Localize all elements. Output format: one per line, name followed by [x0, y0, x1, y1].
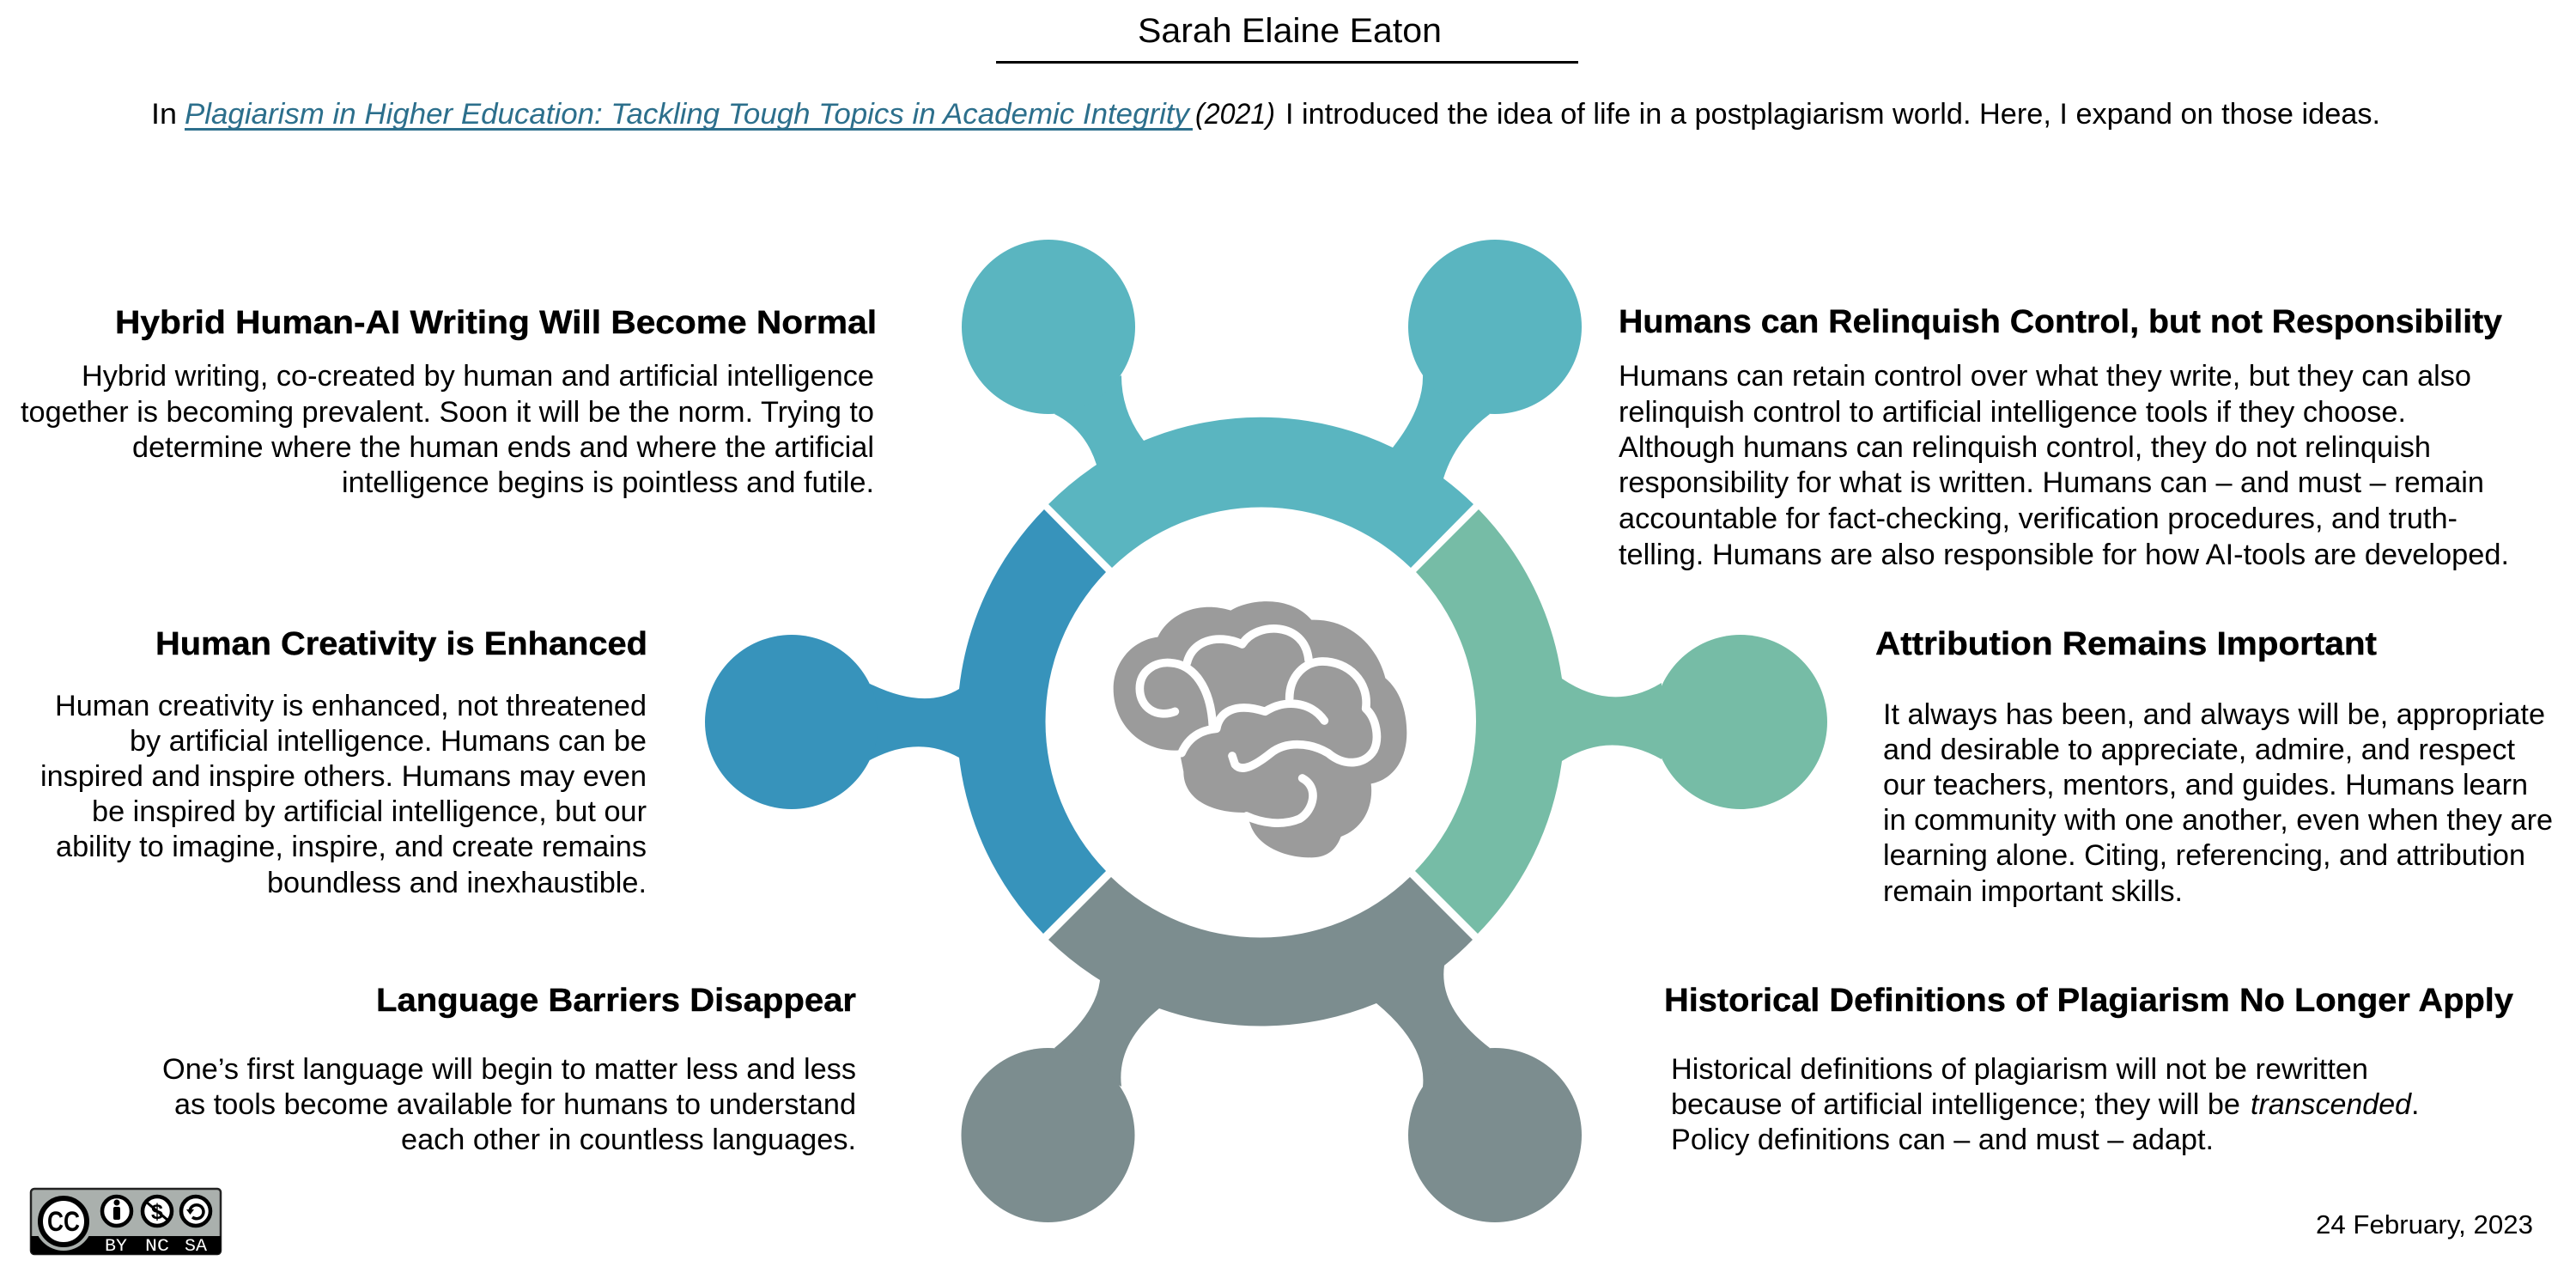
- heading: Attribution Remains Important: [1875, 626, 2377, 662]
- ring segment: right, green, with one arm: [1415, 509, 1827, 934]
- ring segment: left, blue, with one arm: [705, 509, 1106, 934]
- panel: hybrid writing: [21, 305, 877, 499]
- body text: determine where the human ends and where the artificial: [132, 431, 874, 464]
- icon: Creative Commons BY-NC-SA badge: [31, 1189, 221, 1257]
- body text: each other in countless languages.: [401, 1124, 856, 1156]
- body text: inspired and inspire others. Humans may even: [40, 760, 647, 793]
- body text: be inspired by artificial intelligence, but our: [92, 795, 647, 828]
- panel: language barriers: [162, 983, 856, 1156]
- date: 24 February, 2023: [2316, 1209, 2533, 1240]
- title: Sarah Elaine Eaton: [1138, 12, 1442, 50]
- body text: Although humans can relinquish control, they do not relinquish: [1619, 431, 2431, 464]
- body text: in community with one another, even when they are: [1883, 804, 2553, 837]
- icon: Creative Commons BY-NC-SA badge: NC: [145, 1237, 169, 1257]
- body text: [40, 690, 647, 899]
- body text: Hybrid writing, co-created by human and artificial intelligence: [82, 360, 874, 393]
- body text: One’s first language will begin to matter less and less: [162, 1053, 856, 1086]
- body text: It always has been, and always will be, appropriate: [1883, 698, 2545, 731]
- body text: [162, 1053, 856, 1156]
- heading: Humans can Relinquish Control, but not Responsibility: [1619, 304, 2502, 340]
- body text: accountable for fact-checking, verification procedures, and truth-: [1619, 502, 2458, 535]
- body text: transcended: [2251, 1088, 2412, 1121]
- ring segment: top, teal, with two arms: [962, 240, 1582, 568]
- heading: Hybrid Human-AI Writing Will Become Normal: [115, 305, 877, 341]
- body text: our teachers, mentors, and guides. Humans learn: [1883, 769, 2528, 801]
- intro sentence: [151, 98, 2380, 131]
- panel: historical definitions: [1664, 983, 2513, 1156]
- body text: remain important skills.: [1883, 875, 2183, 908]
- body text: Humans can retain control over what they write, but they can also: [1619, 360, 2471, 393]
- body text: intelligence begins is pointless and futile.: [342, 466, 874, 499]
- body text: boundless and inexhaustible.: [267, 867, 647, 899]
- panel: attribution: [1875, 626, 2553, 908]
- body text: Human creativity is enhanced, not threatened: [55, 690, 647, 722]
- icon: Creative Commons BY-NC-SA badge: BY: [105, 1237, 127, 1257]
- body text: by artificial intelligence. Humans can be: [130, 725, 647, 758]
- panel: relinquish control: [1619, 304, 2509, 571]
- heading: Human Creativity is Enhanced: [155, 626, 647, 662]
- body text: Policy definitions can – and must – adapt.: [1671, 1124, 2214, 1156]
- body text: [1671, 1053, 2420, 1156]
- body text: as tools become available for humans to understand: [174, 1088, 856, 1121]
- body text: responsibility for what is written. Humans can – and must – remain: [1619, 466, 2484, 499]
- body text: and desirable to appreciate, admire, and respect: [1883, 734, 2515, 766]
- intro sentence: (2021): [1195, 98, 1275, 131]
- intro sentence: In: [151, 98, 177, 131]
- body text: [1883, 698, 2553, 908]
- body text: together is becoming prevalent. Soon it will be the norm. Trying to: [21, 396, 874, 429]
- body text: .: [2411, 1088, 2420, 1121]
- heading: Language Barriers Disappear: [376, 983, 856, 1019]
- panel: human creativity: [40, 626, 647, 899]
- icon: Creative Commons BY-NC-SA badge: CC: [47, 1206, 80, 1237]
- title underline: [996, 61, 1578, 64]
- body text: learning alone. Citing, referencing, and attribution: [1883, 839, 2525, 872]
- body text: [21, 360, 874, 499]
- body text: ability to imagine, inspire, and create remains: [56, 831, 647, 863]
- icon: Creative Commons BY-NC-SA badge: SA: [185, 1237, 207, 1257]
- body text: relinquish control to artificial intelligence tools if they choose.: [1619, 396, 2406, 429]
- body text: Historical definitions of plagiarism will not be rewritten: [1671, 1053, 2368, 1086]
- intro sentence: Plagiarism in Higher Education: Tackling Tough Topics in Academic Integrity: [185, 98, 1191, 131]
- icon: brain: [1114, 601, 1406, 857]
- icon: Creative Commons BY-NC-SA badge: $: [151, 1200, 163, 1224]
- heading: Historical Definitions of Plagiarism No Longer Apply: [1664, 983, 2513, 1019]
- body text: telling. Humans are also responsible for how AI-tools are developed.: [1619, 539, 2509, 571]
- intro sentence: I introduced the idea of life in a postplagiarism world. Here, I expand on those ideas.: [1285, 98, 2380, 131]
- body text: because of artificial intelligence; they will be: [1671, 1088, 2240, 1121]
- ring segment: bottom, grey, with two arms: [962, 877, 1582, 1222]
- body text: [1619, 360, 2509, 571]
